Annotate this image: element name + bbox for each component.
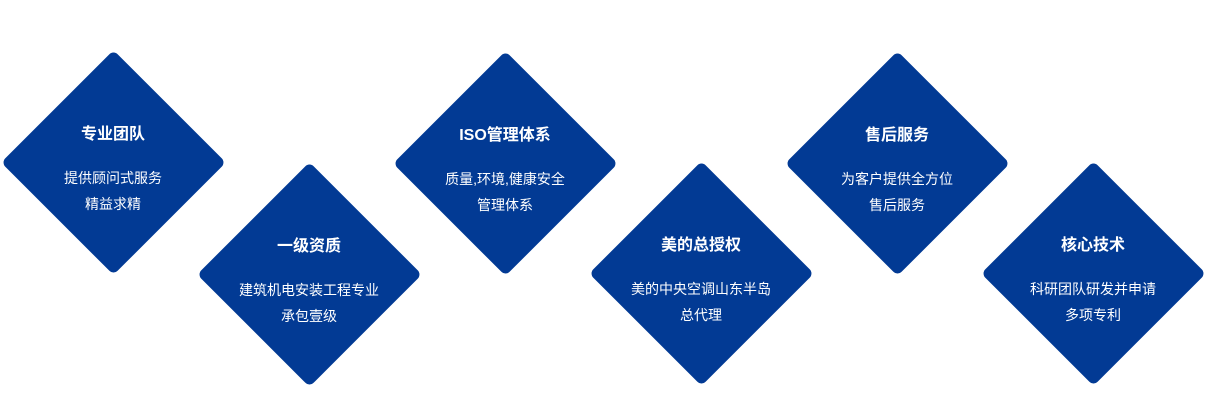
- panel: ISO管理体系: [396, 54, 616, 274]
- description: 承包壹级: [281, 308, 337, 324]
- description: 美的中央空调山东半岛: [631, 281, 771, 297]
- description: 售后服务: [869, 197, 925, 213]
- description: 精益求精: [85, 196, 141, 212]
- description: [631, 281, 771, 323]
- panel: 售后服务: [788, 54, 1008, 274]
- diamond background: [981, 161, 1205, 385]
- heading: 专业团队: [81, 126, 145, 143]
- description: 建筑机电安装工程专业: [239, 282, 379, 298]
- description: 科研团队研发并申请: [1030, 281, 1156, 297]
- diamond background: [393, 51, 617, 275]
- panel: 美的总授权: [592, 164, 812, 384]
- description: 管理体系: [477, 197, 533, 213]
- description: 总代理: [680, 307, 722, 323]
- panel: 专业团队: [4, 52, 224, 272]
- diamond background: [1, 50, 225, 274]
- panel: 一级资质: [200, 164, 420, 384]
- description: [841, 171, 953, 213]
- description: 质量,环境,健康安全: [445, 171, 565, 187]
- diamond background: [589, 161, 813, 385]
- description: 为客户提供全方位: [841, 171, 953, 187]
- description: [239, 282, 379, 324]
- description: [64, 170, 162, 212]
- heading: 美的总授权: [661, 237, 741, 254]
- heading: 售后服务: [865, 127, 929, 144]
- panel: 核心技术: [984, 164, 1204, 384]
- heading: 一级资质: [277, 238, 341, 255]
- description: 提供顾问式服务: [64, 170, 162, 186]
- description: [445, 171, 565, 213]
- diamond background: [785, 51, 1009, 275]
- heading: 核心技术: [1061, 237, 1125, 254]
- description: [1030, 281, 1156, 323]
- heading: ISO管理体系: [459, 127, 551, 144]
- diamond background: [197, 162, 421, 386]
- description: 多项专利: [1065, 307, 1121, 323]
